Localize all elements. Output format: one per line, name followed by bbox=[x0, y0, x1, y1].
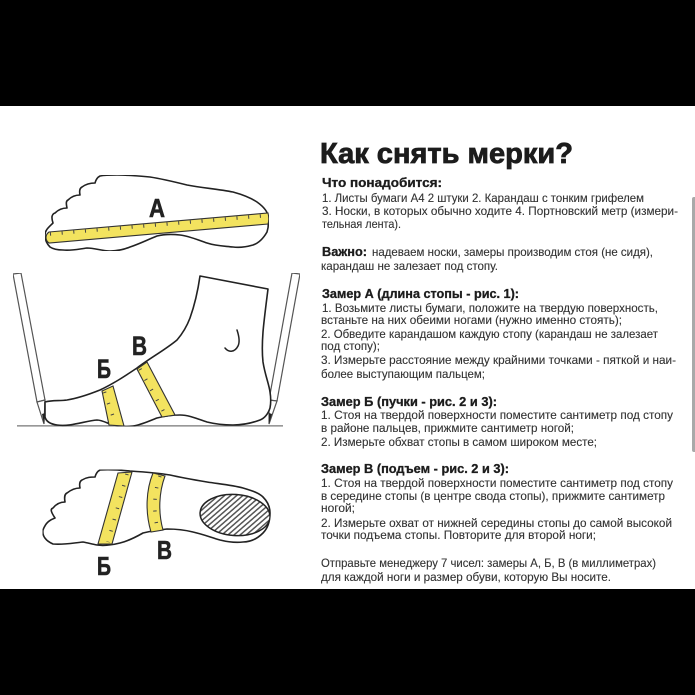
section: measure В: 1. Стоя на твердой поверхности поместите сантиметр под стопу bbox=[321, 477, 673, 490]
foot outline bbox=[45, 175, 268, 251]
section: measure Б: Замер Б (пучки - рис. 2 и 3): bbox=[321, 394, 497, 409]
title: Как снять мерки? bbox=[320, 138, 573, 170]
section: important: карандаш не залезает под стопу. bbox=[321, 260, 498, 273]
white page panel bbox=[0, 106, 695, 589]
section: important: надеваем носки, замеры производим стоя (не сидя), bbox=[372, 246, 653, 259]
section: measure Б: в районе пальцев, прижмите сантиметр ногой; bbox=[321, 422, 574, 435]
section: what you need bbox=[322, 175, 678, 231]
label Б side: Б bbox=[97, 354, 111, 384]
section: measure Б: 1. Стоя на твердой поверхности поместите сантиметр под стопу bbox=[321, 409, 673, 422]
ground line bbox=[17, 425, 283, 427]
ankle mark bbox=[225, 330, 239, 351]
section: important: Важно: bbox=[322, 244, 367, 259]
section: important bbox=[321, 244, 653, 273]
right pencil bbox=[269, 273, 300, 424]
section: what you need: Что понадобится: bbox=[322, 175, 442, 190]
section: measure A: 2. Обведите карандашом каждую стопу (карандаш не залезает bbox=[321, 328, 659, 341]
section: measure Б bbox=[321, 394, 673, 449]
tape Б side bbox=[102, 386, 124, 426]
section: measure A: встаньте на них обеими ногами (нужно именно стоять); bbox=[321, 314, 622, 327]
closing note bbox=[321, 557, 656, 584]
section: measure A: 3. Измерьте расстояние между крайними точками - пяткой и наи- bbox=[321, 354, 676, 367]
tape Б sole bbox=[98, 472, 132, 544]
section: what you need: тельная лента). bbox=[322, 218, 401, 231]
tape В side bbox=[137, 362, 175, 417]
label A: А bbox=[149, 193, 165, 223]
section: measure В: ногой; bbox=[321, 502, 355, 515]
section: measure A: под стопу); bbox=[321, 340, 380, 353]
hatched heel bbox=[199, 492, 271, 538]
label В side: В bbox=[132, 331, 147, 361]
left pencil bbox=[13, 273, 45, 424]
closing note: для каждой ноги и размер обуви, которую Вы носите. bbox=[321, 571, 611, 584]
section: measure В: точки подъема стопы. Повторите для второй ноги; bbox=[321, 529, 596, 542]
label Б sole: Б bbox=[97, 551, 111, 581]
figure 1: foot sole with length tape A bbox=[45, 175, 269, 251]
foot side outline bbox=[45, 276, 271, 426]
measuring tape A bbox=[46, 213, 269, 243]
section: measure A: 1. Возьмите листы бумаги, положите на твердую поверхность, bbox=[322, 302, 658, 315]
closing note: Отправьте менеджеру 7 чисел: замеры А, Б, В (в миллиметрах) bbox=[321, 557, 656, 570]
section: measure A: Замер А (длина стопы - рис. 1): bbox=[322, 286, 519, 301]
section: measure Б: 2. Измерьте обхват стопы в самом широком месте; bbox=[321, 436, 597, 449]
instructions text column bbox=[320, 138, 678, 584]
section: measure В: 2. Измерьте охват от нижней середины стопы до самой высокой bbox=[321, 517, 672, 530]
tape В sole bbox=[147, 473, 165, 532]
section: measure A: более выступающим пальцем; bbox=[321, 368, 485, 381]
figure 2: foot side view with pencils bbox=[13, 273, 300, 426]
sole outline bbox=[43, 470, 270, 545]
label В sole: В bbox=[157, 535, 172, 565]
figure 3: sole with Б and В tapes bbox=[43, 470, 271, 581]
section: what you need: 1. Листы бумаги А4 2 штуки 2. Карандаш с тонким грифелем bbox=[322, 192, 644, 205]
section: measure A bbox=[321, 286, 676, 381]
section: measure В: Замер В (подъем - рис. 2 и 3): bbox=[321, 461, 509, 476]
section: measure В: в середине стопы (в центре свода стопы), прижмите сантиметр bbox=[321, 490, 665, 503]
section: what you need: 3. Носки, в которых обычно ходите 4. Портновский метр (измери- bbox=[322, 205, 678, 218]
section: measure В bbox=[321, 461, 673, 542]
scrollbar edge bbox=[692, 197, 695, 452]
